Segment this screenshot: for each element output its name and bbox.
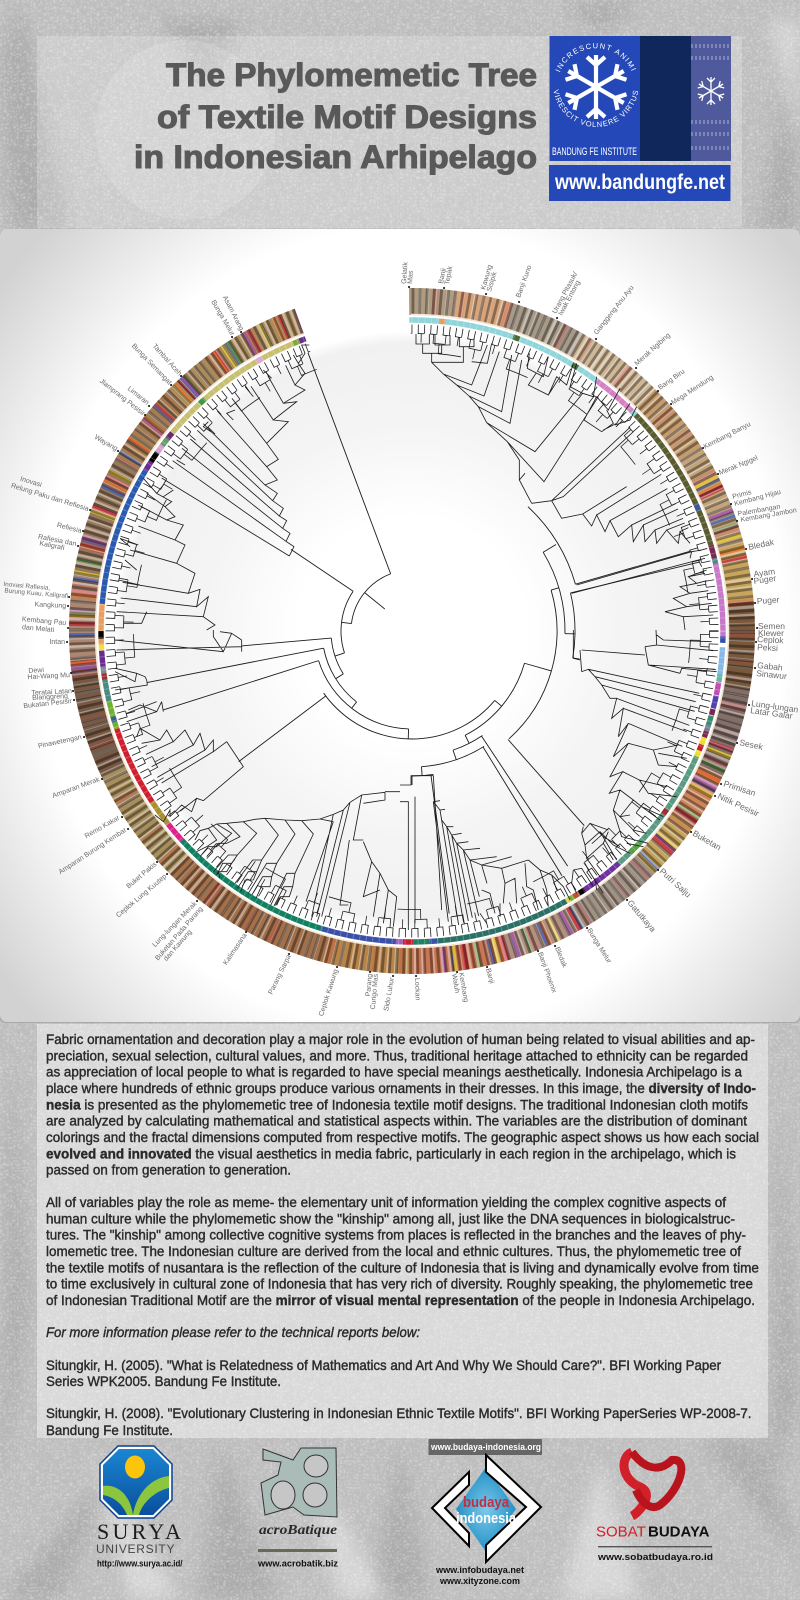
reference 2: Bandung Fe Institute. xyxy=(46,1422,173,1438)
logo: Budaya Indonesia: indonesia xyxy=(456,1510,517,1527)
logo: Sobat Budaya xyxy=(596,1452,713,1562)
labels: lower right: Bledak xyxy=(553,946,568,969)
labels: upper left: Jlamprang Pesisir xyxy=(98,378,147,418)
tree branches: lower right quadrant xyxy=(400,630,717,930)
labels: upper left: Intan xyxy=(49,639,65,646)
paragraph 1: passed on from generation to generation. xyxy=(46,1162,291,1178)
labels: top and right: Kembang Banyu xyxy=(703,421,752,451)
reference note: For more information please refer to the technical reports below: xyxy=(46,1324,420,1340)
labels: upper left: Tambal Aceh xyxy=(151,343,183,377)
logo: Sobat Budaya: www.sobatbudaya.ro.id xyxy=(597,1552,713,1562)
labels: top and right: Tepak xyxy=(444,265,454,285)
paragraph 2: lomemetic tree. The Indonesian culture are derived from the local and ethnic cultures. Thus, the phylomemetic tree of xyxy=(46,1243,741,1259)
paragraph 2: of Indonesian Traditional Motif are the mirror of visual mental representation of the people in Indonesia Archipelago. xyxy=(46,1292,755,1308)
labels: top and right: Ayam xyxy=(753,566,776,579)
paragraph 2: All of variables play the role as meme- the elementary unit of information yielding the complex cognitive aspects of xyxy=(46,1194,726,1210)
logo: Bandung Fe Institute: www.bandungfe.net xyxy=(554,171,725,194)
labels: lower left: Blanggreng xyxy=(32,693,68,702)
labels: upper left: Kaligrafi xyxy=(39,540,65,552)
reference 2 xyxy=(46,1405,752,1438)
labels: lower left: Buket Pakis xyxy=(125,861,159,890)
paragraph 2: human culture while the phylomemetic show the "kinship" among all, just like the DNA sequences in biologicalstruc- xyxy=(46,1210,735,1226)
logo: Budaya Indonesia: www.xityzone.com xyxy=(439,1576,520,1586)
labels: top and right: Klewer xyxy=(758,628,784,638)
labels: top and right: Kawung xyxy=(480,264,494,291)
header panel xyxy=(37,36,742,228)
labels: lower right: Banji Phoenix xyxy=(536,951,558,994)
labels: lower right: Kembang xyxy=(457,972,469,1003)
labels: lower left: Pinawetengan xyxy=(38,734,83,750)
motif name labels xyxy=(3,261,799,1017)
logo: Surya University xyxy=(96,1446,183,1569)
labels: top and right: Ceplok xyxy=(757,634,785,645)
tree branches: upper right quadrant xyxy=(416,334,713,630)
paragraph 1: Fabric ornamentation and decoration play a major role in the evolution of human being related to visual abilities and ap- xyxy=(46,1031,755,1047)
labels: lower right: Waluh xyxy=(450,973,460,994)
labels: lower left: Curigo Mas xyxy=(370,973,380,1010)
logo: Surya University: SURYA xyxy=(97,1519,181,1544)
labels: top and right: Puger xyxy=(753,573,777,586)
labels: upper left: Inovasi Rafiesia, xyxy=(3,581,51,592)
labels: top and right: Kembang Jambon xyxy=(740,507,797,524)
logo: Bandung Fe Institute xyxy=(549,36,731,201)
title xyxy=(134,57,537,175)
leaf ticks and low-level pairings xyxy=(110,329,714,933)
labels: lower left: Bukatan Pesisir xyxy=(23,698,73,710)
labels: lower left xyxy=(23,667,396,1017)
title: of Textile Motif Designs xyxy=(157,99,537,135)
paragraph 1: nesia is presented as the phylomemetic tree of Indonesia textile motif designs. The traditional Indonesian cloth motifs xyxy=(46,1096,748,1112)
logo: Bandung Fe Institute: VIRESCIT VOLNERE VIRTUS xyxy=(554,89,638,128)
labels: upper left: Kangkung xyxy=(34,601,66,610)
labels: lower right: Buketan xyxy=(691,828,723,852)
labels: upper left xyxy=(3,295,244,646)
labels: upper left: dan Melati xyxy=(22,624,55,634)
logo: Bandung Fe Institute: BANDUNG FE INSTITUTE xyxy=(552,146,637,158)
icon: large snowflake xyxy=(564,55,628,119)
title: in Indonesian Arhipelago xyxy=(134,139,537,175)
labels: lower right: Lockan xyxy=(413,978,421,1001)
labels: top and right: Mas xyxy=(407,270,415,284)
paragraph 1: as appreciation of local people to what is regarded to have special meanings aesthetically. Indonesia Archipelago is a xyxy=(46,1064,742,1080)
labels: top and right: Merak Ngigel xyxy=(718,455,759,477)
logo: Surya University: UNIVERSITY xyxy=(96,1542,174,1556)
paragraph 1: are analyzed by calculating mathematical and statistical aspects within. The variables are the distribution of dominant xyxy=(46,1113,747,1129)
labels: lower left: Parang xyxy=(365,973,374,997)
outer ring of textile motifs xyxy=(69,288,755,974)
logo: Budaya Indonesia: budaya xyxy=(463,1494,510,1511)
labels: upper left: Kembang Pau xyxy=(22,616,67,627)
logo: Surya University: http://www.surya.ac.id/ xyxy=(97,1559,183,1569)
labels: upper left: Rafiesia dan xyxy=(37,534,77,548)
labels: lower right xyxy=(413,737,765,1003)
labels: lower left: Ceplok Kawung xyxy=(318,968,340,1017)
labels: top and right: Gabah xyxy=(757,660,783,673)
logo: Budaya Indonesia: www.budaya-indonesia.org xyxy=(430,1442,541,1452)
labels: top and right: Lung-lungan xyxy=(751,698,799,715)
logo: AcroBatique xyxy=(257,1448,339,1569)
labels: top and right: Banji Kuno xyxy=(515,264,533,299)
labels: lower left: dan Kawung xyxy=(163,929,194,963)
tree branches: upper left quadrant xyxy=(117,345,309,630)
labels: upper left: Bunga Melur xyxy=(209,299,236,338)
labels: top and right: Sinawur xyxy=(756,668,788,681)
icon: small snowflake xyxy=(697,77,725,105)
labels: upper left: Inovasi xyxy=(19,476,43,489)
logo: Bandung Fe Institute: INCRESCUNT ANIMI xyxy=(555,43,636,72)
paragraph 2: to time exclusively in cultural zone of Indonesia that has very rich of diversity. Roughly speaking, the phylomemetic tree xyxy=(46,1276,753,1292)
labels: lower right: Nitik Pesisir xyxy=(716,791,761,819)
labels: lower left: Hai-Wang Mu xyxy=(27,672,70,681)
title: The Phylomemetic Tree xyxy=(166,57,537,93)
labels: top and right: Semen xyxy=(758,621,785,631)
paragraph 2 xyxy=(46,1194,759,1308)
labels: top and right: Bang Biru xyxy=(657,368,686,392)
labels: top and right xyxy=(401,261,799,721)
labels: lower left: Remo Kakar xyxy=(84,814,122,840)
labels: lower right: Banji xyxy=(484,968,495,985)
labels: top and right: Banji xyxy=(438,267,448,284)
labels: lower left: Sido Luhur xyxy=(383,976,396,1012)
labels: lower left: Ceplok Lung Kuutep xyxy=(115,873,168,919)
paragraph 2: tures. The "kinship" among collective cognitive systems from places is reflected in the branches and the leaves of phy- xyxy=(46,1227,746,1243)
labels: top and right: Urang Pitasuk/ xyxy=(552,271,579,315)
body text panel xyxy=(37,1024,768,1438)
labels: top and right: Gelatik xyxy=(401,261,410,284)
reference 2: Situngkir, H. (2008). "Evolutionary Clustering in Indonesian Ethnic Textile Motifs". BFI Working PaperSeries WP-2008-7. xyxy=(46,1405,752,1421)
labels: lower left: Kalimasana xyxy=(222,932,249,966)
labels: lower right: Primisan xyxy=(722,778,757,798)
paragraph 1: colorings and the fractal dimensions computed from respective motifs. The geographic aspect shows us how each social xyxy=(46,1129,759,1145)
labels: upper left: Relung Paku dan Refiesia xyxy=(10,483,90,513)
labels: top and right: Merak Ngibing xyxy=(634,332,672,367)
labels: top and right: Mega Mendung xyxy=(670,374,715,407)
logo: Budaya Indonesia xyxy=(428,1439,542,1586)
logo: Budaya Indonesia: www.infobudaya.net xyxy=(435,1565,524,1575)
anchor dots for labels xyxy=(67,287,757,976)
reference 1: Series WPK2005. Bandung Fe Institute. xyxy=(46,1373,281,1389)
labels: upper left: Refiesia xyxy=(56,522,82,535)
labels: top and right: Bledak xyxy=(747,537,776,552)
logo: AcroBatique: acroBatique xyxy=(259,1523,337,1538)
labels: lower left: Amparan Merak xyxy=(51,776,101,800)
reference 1: Situngkir, H. (2005). "What is Relatedness of Mathematics and Art And Why We Should Care?". BFI Working Paper xyxy=(46,1357,721,1373)
labels: top and right: Sisipik xyxy=(486,271,499,293)
labels: top and right: Latar Galar xyxy=(750,705,793,721)
labels: lower right: Gatutkaya xyxy=(625,898,658,934)
reference 1 xyxy=(46,1357,721,1389)
labels: top and right: Palembangan xyxy=(737,504,781,518)
labels: lower right: Sesek xyxy=(739,737,765,752)
tree branches: lower left quadrant xyxy=(115,630,400,927)
logo: AcroBatique: www.acrobatik.biz xyxy=(257,1559,339,1569)
tree trunk: central arcs and radial branches xyxy=(147,353,700,914)
labels: lower left: Teratai Latan xyxy=(31,688,72,697)
logo: Sobat Budaya: SOBAT xyxy=(596,1524,646,1541)
labels: upper left: Asam Arang xyxy=(221,295,244,332)
labels: lower left: Lung-lungan Merak xyxy=(151,900,199,949)
logo: Sobat Budaya: BUDAYA xyxy=(648,1524,710,1541)
labels: top and right: Ganggeng Anu Ayu xyxy=(593,284,636,336)
labels: top and right: Iwak Entong xyxy=(558,280,582,317)
labels: upper left: Limaran xyxy=(126,385,150,407)
labels: lower left: Parang Sarpa xyxy=(268,954,293,996)
labels: lower right: Bunga Melur xyxy=(585,927,613,965)
labels: top and right: Primis xyxy=(732,489,753,501)
paragraph 1: place where hundreds of ethnic groups produce various ornaments in their dresses. In this image, the diversity of Indo- xyxy=(46,1080,756,1096)
labels: upper left: Bunga Semangat xyxy=(130,343,173,386)
paragraph 2: the textile motifs of nusantara is the reflection of the culture of Indonesia that is living and dynamically evolve from time xyxy=(46,1259,759,1275)
labels: upper left: Wayang xyxy=(93,434,119,453)
paragraph 1 xyxy=(46,1031,759,1178)
labels: top and right: Puger xyxy=(756,594,780,606)
white tree panel xyxy=(0,229,800,1023)
labels: lower left: Buketan Pada Parang xyxy=(154,906,205,962)
paragraph 1: preciation, sexual selection, cultural values, and more. Thus, traditional heritage attached to ethnicity can be regarded xyxy=(46,1047,748,1063)
ring of coloured region dots xyxy=(98,317,726,945)
labels: top and right: Kembang Hijau xyxy=(734,489,782,508)
labels: upper left: Burung Kuau, Kaligrafi xyxy=(4,587,68,600)
labels: top and right: Peksi xyxy=(757,642,778,653)
phylomemetic tree diagram xyxy=(69,288,755,974)
labels: lower left: Amparan Burung Kembar xyxy=(58,826,129,876)
labels: lower right: Putri Salju xyxy=(658,866,693,900)
paragraph 1: evolved and innovated the visual aesthetics in media fabric, particularly in each region in the archipelago, which is xyxy=(46,1145,736,1161)
labels: lower left: Dewi xyxy=(28,667,45,675)
